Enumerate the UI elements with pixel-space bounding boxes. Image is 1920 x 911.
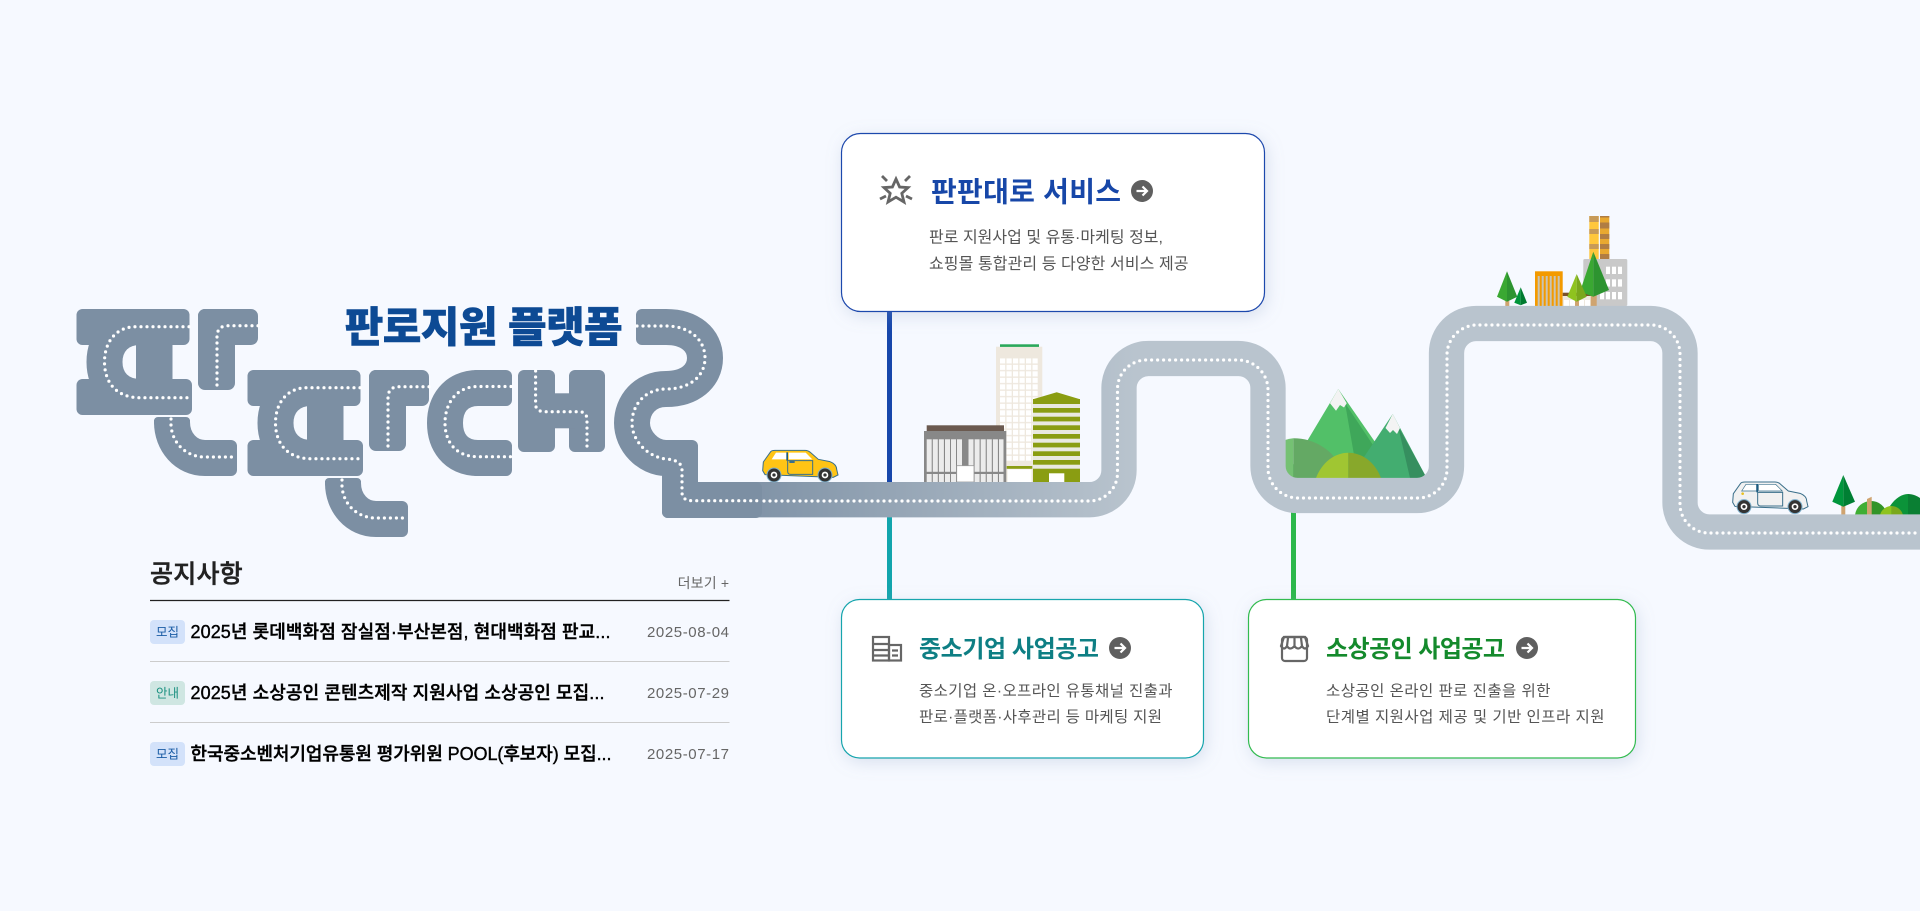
left tree [1497,271,1517,306]
panel: 중소기업 사업공고 card [842,600,1204,758]
notice row 3: 모집 [156,748,179,762]
notice row 1: 2025-08-04 [647,624,729,641]
wooden pole [1867,497,1872,515]
panel: 소상공인 사업공고 card [1248,600,1636,758]
big bush [1886,494,1908,515]
card description: 쇼핑몰 통합관리 등 다양한 서비스 제공 [929,255,1188,273]
notice row 2 [150,681,729,705]
small dark tree [1514,287,1527,305]
icon: office building [873,637,901,660]
green hill [1285,438,1293,478]
card title: 중소기업 사업공고 [919,636,1099,663]
notice row 2: 안내 [156,686,179,700]
tower building [996,344,1042,482]
lime tree [1567,274,1587,306]
card description: 소상공인 온라인 판로 진출을 위한 [1326,682,1550,700]
notice row 2: 2025-07-29 [647,685,729,702]
connector: blue line to service card [887,310,892,482]
card title: 소상공인 사업공고 [1326,636,1505,663]
notice row 3 [150,742,729,766]
grey factory [1583,259,1627,306]
card description: 판로 지원사업 및 유통·마케팅 정보, [929,229,1163,247]
icon: white car [1733,482,1808,514]
big tree [1580,252,1609,306]
more link: 더보기 + [678,575,729,591]
notice row 1 [150,620,729,644]
logo letter group: second 판 [248,370,429,537]
notice row 2: 2025년 소상공인 콘텐츠제작 지원사업 소상공인 모집... [190,683,604,703]
notice row 1: 2025년 롯데백화점 잠실점·부산본점, 현대백화점 판교... [190,622,610,642]
icon: arrow button [1516,637,1538,659]
right tree [1832,475,1855,515]
card title: 판판대로 서비스 [931,176,1121,208]
logo letter: 대 H shape [518,370,605,452]
card description: 판로·플랫폼·사후관리 등 마케팅 지원 [919,708,1162,726]
logo letter: 로 S curve joining the road [632,309,762,518]
notice row 3: 2025-07-17 [647,746,729,763]
grey low building [924,425,1006,482]
illustration: city buildings [924,344,1080,482]
green striped building [1033,392,1080,482]
logo: 판판대로 made of road pieces [76,309,762,537]
panel: notice board [150,560,730,766]
winding road [740,324,1920,533]
illustration: factory and trees on the upper road [1497,216,1627,306]
notice row 1: 모집 [156,626,179,640]
logo letter: 대 C shape [445,370,512,476]
chimney [1589,216,1609,259]
connector: teal line to SME card [887,517,892,601]
second mountain [1350,414,1426,478]
green bush [1855,501,1871,515]
heading: 판로지원 플랫폼: 판로지원 플랫폼 [345,304,623,351]
illustration: mountains and hills [1285,389,1426,478]
logo letter group: first 판 [76,309,258,476]
card description: 중소기업 온·오프라인 유통채널 진출과 [919,682,1172,700]
card description [1326,682,1604,726]
icon: star burst [880,176,912,202]
illustration: trees and bushes at right edge [1832,475,1920,515]
card description [929,229,1188,273]
orange building [1535,271,1563,306]
icon: arrow button [1109,637,1131,659]
card description [919,682,1172,726]
notice heading: 공지사항 [150,560,243,588]
lime bush [1880,506,1892,515]
icon: storefront [1281,637,1308,661]
small cream building [1563,293,1592,306]
lime hill [1316,453,1348,478]
notice row 3: 한국중소벤처기업유통원 평가위원 POOL(후보자) 모집... [190,744,612,764]
icon: arrow button [1131,180,1153,202]
panel: 판판대로 서비스 card [842,134,1264,312]
big mountain [1285,389,1400,478]
connector: green line to small business card [1291,512,1296,601]
card description: 단계별 지원사업 제공 및 기반 인프라 지원 [1326,708,1604,726]
icon: yellow car [763,450,838,482]
